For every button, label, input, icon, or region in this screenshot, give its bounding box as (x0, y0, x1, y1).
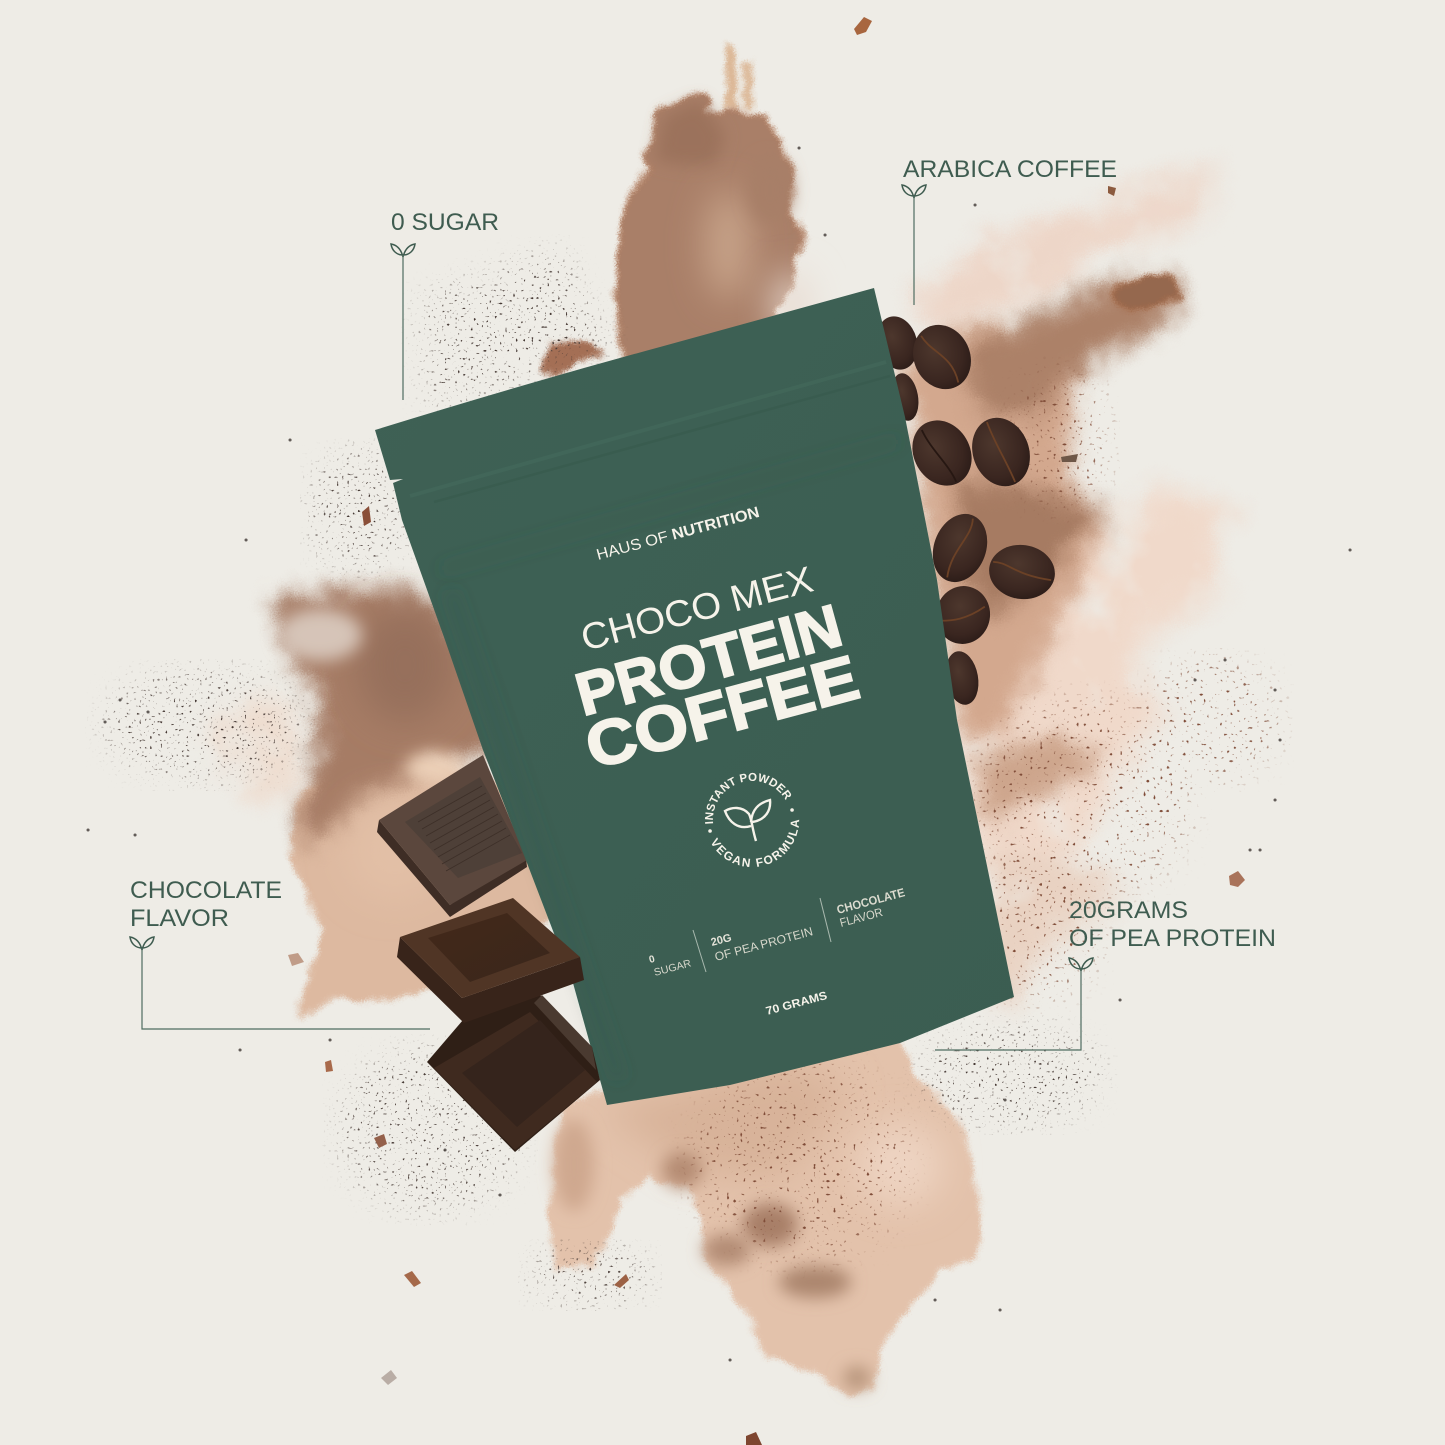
bean (963, 410, 1039, 494)
badge ring text bottom: VEGAN FORMULA (712, 820, 800, 867)
powder: bottom burst (548, 1030, 983, 1397)
powder: streak tip (1110, 275, 1181, 310)
chip top (854, 17, 872, 35)
chip near beans (1061, 454, 1078, 462)
product title: coffee: COFFEE (579, 643, 866, 783)
powder: bottom dark blob (662, 1152, 702, 1188)
powder: top plume right blob (748, 156, 792, 224)
speckles: rust on upper right (1010, 370, 1110, 510)
bag zipper shading (434, 376, 890, 502)
bag seal fold shading (410, 362, 886, 496)
powder: peach near beans (900, 320, 1105, 735)
bag feature: chocolate flavor (835, 885, 906, 930)
chip left (288, 953, 304, 966)
powder: dark patch by bag (541, 338, 606, 378)
powder: left mid glow (345, 800, 445, 900)
powder: bottom dark blob (742, 1203, 798, 1247)
powder: pale mist on plume right (774, 273, 810, 337)
stray grains (88, 148, 1350, 1360)
callout: chocolate flavor: FLAVOR (130, 905, 229, 932)
bag left fold shading (450, 590, 620, 1080)
powder: pale right lower (960, 500, 1238, 905)
powder: right lower tint (975, 850, 1120, 1010)
badge (704, 772, 800, 867)
powder: left pale mist (278, 609, 362, 661)
chip bottom (614, 1274, 629, 1288)
powder: brown streak (960, 276, 1180, 420)
powder: bottom dark blob (703, 1234, 751, 1266)
bean (986, 541, 1058, 603)
callout: 20 grams of pea protein (935, 897, 1276, 1050)
bag feature: 0 sugar: 0 (648, 954, 657, 966)
speckles: under chocolate (340, 1050, 520, 1210)
bag lower seal shading (440, 440, 900, 570)
product bag (375, 288, 1014, 1105)
powder: top wisps (724, 45, 752, 110)
bean (901, 410, 983, 496)
bean (924, 506, 996, 590)
powder: bottom tan upper (600, 1060, 850, 1180)
badge sprout (725, 800, 770, 841)
chocolate piece: top (377, 755, 527, 917)
speckles: left spray (105, 670, 305, 780)
bean (888, 371, 922, 423)
bag body (375, 288, 1014, 1105)
callout: chocolate flavor: CHOCOLATE (130, 877, 282, 904)
scattered speckles (105, 250, 1280, 1305)
chocolate piece: bottom (427, 995, 600, 1152)
chip left small (362, 506, 371, 526)
chip lower left (404, 1271, 421, 1287)
bag divider (820, 898, 831, 942)
bag feature: 0 sugar: SUGAR (653, 957, 693, 979)
speckles: lower right (920, 1025, 1100, 1125)
speckles: rust lower (960, 860, 1100, 1000)
bean (871, 312, 923, 374)
badge dots (710, 810, 792, 831)
chip left low (325, 1060, 333, 1072)
powder: brown by beans (955, 475, 1105, 620)
powder: bottom dark blob (779, 1266, 851, 1298)
callout: 20 grams of pea protein: 20GRAMS (1069, 897, 1188, 924)
powder: lower right streak (975, 735, 1105, 825)
product title: protein: PROTEIN (569, 592, 849, 729)
net weight: 70 GRAMS (765, 990, 829, 1018)
powder: top plume light column (706, 190, 750, 300)
callout: arabica coffee (902, 156, 1117, 305)
powder: left highlight (405, 752, 465, 784)
powder: left pink spray (190, 680, 310, 800)
brand name: HAUS OF NUTRITION (595, 504, 761, 564)
powder: top plume dark (655, 100, 725, 165)
powder: left darkest (357, 607, 453, 723)
bag divider (693, 930, 706, 972)
bag feature: chocolate flavor: FLAVOR (838, 905, 885, 930)
chip bottom edge (746, 1432, 762, 1445)
callout: chocolate flavor (130, 877, 430, 1029)
powder: top plume edge (615, 90, 803, 362)
dark grains (88, 148, 1350, 1360)
badge ring text top: INSTANT POWDER (704, 772, 792, 824)
callout: arabica coffee: ARABICA COFFEE (903, 156, 1117, 183)
powder: left dark (272, 588, 510, 845)
chip near arabica (1108, 186, 1116, 196)
bean (942, 649, 982, 707)
bean (903, 315, 981, 399)
product title: choco mex: CHOCO MEX (577, 559, 817, 659)
chocolate piece: middle (397, 898, 584, 1023)
chip by chocolate (374, 1134, 387, 1148)
powder: bottom left leg tone (554, 1119, 594, 1211)
callout: 0 sugar: 0 SUGAR (391, 209, 499, 236)
bag feature: 20g pea protein: OF PEA PROTEIN (713, 924, 814, 964)
cocoa chips (288, 17, 1245, 1445)
speckles: rust right (970, 700, 1190, 900)
powder: left lower peach (290, 750, 560, 1020)
speckles: rust right far (1140, 660, 1280, 780)
bean (931, 582, 995, 648)
chip right (1229, 871, 1245, 887)
speckles: left of bag (310, 450, 410, 570)
powder: bottom pale folds (858, 1125, 942, 1205)
powder explosion (190, 45, 1238, 1397)
coffee beans (871, 312, 1058, 707)
callout: 0 sugar (391, 209, 499, 400)
chip pale (381, 1370, 397, 1385)
speckles: bottom left (530, 1245, 650, 1305)
speckles: above bag (420, 250, 610, 410)
bag feature: chocolate flavor: CHOCOLATE (835, 885, 906, 917)
speckles: rust on bottom burst (690, 1060, 910, 1260)
powder: pale upper right wisps (905, 165, 1225, 330)
callout: 20 grams of pea protein: OF PEA PROTEIN (1069, 925, 1276, 952)
powder: bottom tip (843, 1366, 871, 1390)
bag feature: 20g pea protein: 20G (710, 932, 733, 949)
